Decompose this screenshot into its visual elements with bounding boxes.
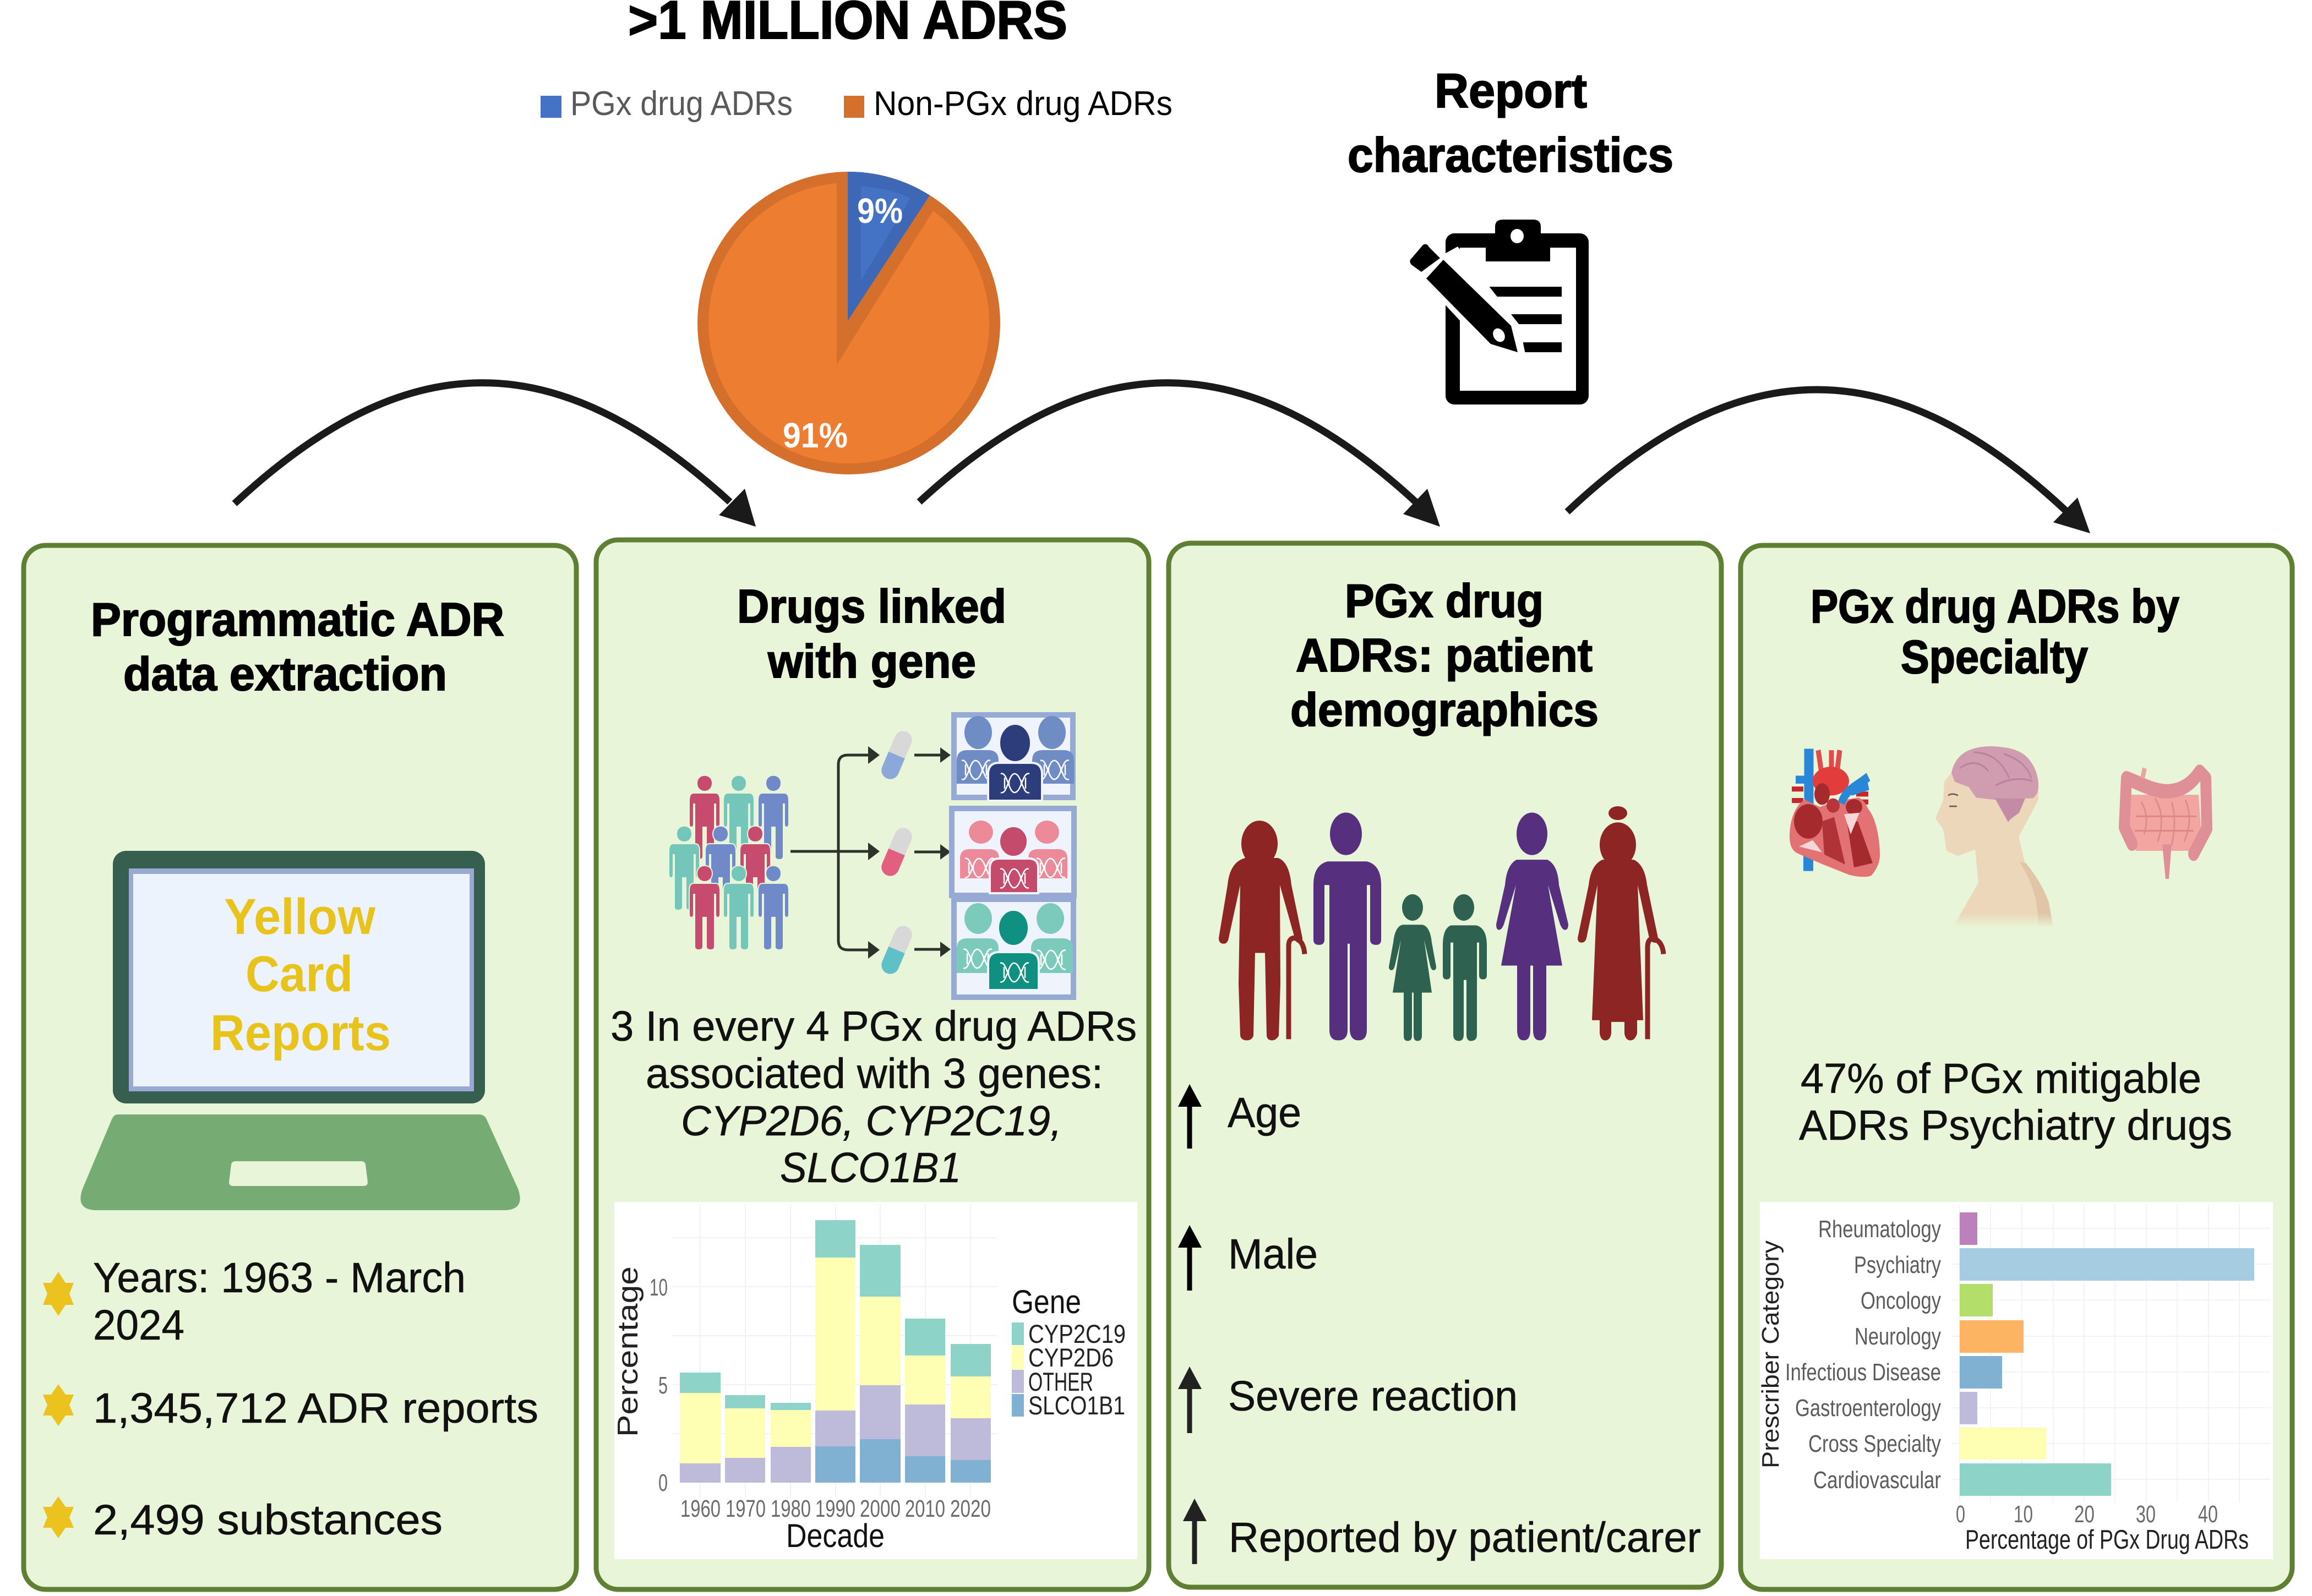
heading: report characteristics: Report: [1435, 63, 1587, 118]
category labels: [1757, 1216, 1941, 1494]
text: male: Male: [1228, 1231, 1318, 1278]
icon: pink capsule: [879, 825, 915, 879]
heading: drugs linked with gene: with gene: [767, 636, 976, 688]
category labels: Cross Specialty: [1808, 1430, 1941, 1457]
pie chart: 9% PGx vs 91% non-PGx: 91%: [783, 416, 848, 455]
figure: girl: [1389, 894, 1436, 1041]
heading: PGx drug ADRs patient demographics: [1290, 575, 1599, 736]
pie chart: 9% PGx vs 91% non-PGx: 9%: [857, 191, 903, 231]
category labels: Oncology: [1861, 1287, 1941, 1314]
category labels: Prescriber Category: [1757, 1240, 1784, 1468]
heading: programmatic ADR data extraction: [91, 594, 504, 701]
category labels: Psychiatry: [1854, 1251, 1941, 1278]
y axis labels: 0: [658, 1469, 668, 1496]
text: age: Age: [1228, 1089, 1301, 1136]
icon: heart: [1790, 749, 1880, 877]
gene legend: OTHER: [1028, 1367, 1093, 1396]
heading: report characteristics: characteristics: [1348, 128, 1673, 182]
category labels: Rheumatology: [1818, 1216, 1941, 1243]
icon: laptop showing Yellow Card Reports: Yellow: [224, 889, 375, 945]
x axis labels: 1960: [680, 1495, 721, 1522]
text: three genes statement: 3 In every 4 PGx drug ADRs: [610, 1003, 1137, 1050]
pie legend: Non-PGx drug ADRs: [874, 85, 1173, 123]
text: ADR report count: 1,345,712 ADR reports: [93, 1385, 538, 1432]
text: three genes statement: SLCO1B1: [780, 1144, 961, 1191]
card: blue gene group: [954, 715, 1074, 801]
icon: blue capsule: [879, 728, 915, 782]
heading: drugs linked with gene: [737, 581, 1006, 688]
text: years: 2024: [93, 1302, 184, 1349]
text: psychiatry statement: ADRs Psychiatry drugs: [1799, 1102, 2232, 1149]
heading: PGx drug ADRs by specialty: Specialty: [1901, 631, 2088, 684]
figure: boy: [1443, 894, 1487, 1041]
heading: report characteristics: [1348, 63, 1673, 182]
icon: laptop showing Yellow Card Reports: [80, 851, 520, 1210]
text: substance count: 2,499 substances: [93, 1496, 443, 1544]
pie chart: 9% PGx vs 91% non-PGx: [697, 172, 1000, 474]
diagram: population, drugs and gene responses: [669, 715, 1074, 997]
gene legend: [1012, 1283, 1126, 1420]
x axis labels: Decade: [786, 1517, 885, 1554]
card: pink gene group: [952, 808, 1074, 895]
pie legend: PGx drug ADRs: [570, 85, 793, 123]
stacked bar chart: percentage by decade and gene: [612, 1202, 1137, 1559]
gene legend: CYP2D6: [1028, 1343, 1114, 1372]
heading: drugs linked with gene: Drugs linked: [737, 581, 1006, 633]
icon: crowd of people: [669, 775, 789, 950]
x axis labels: 2010: [905, 1495, 945, 1522]
icon: family of six: [1219, 806, 1664, 1041]
category labels: Infectious Disease: [1785, 1359, 1941, 1386]
x axis labels: 1970: [726, 1495, 766, 1522]
list: extraction facts: [43, 1254, 538, 1544]
x axis labels: 2000: [860, 1495, 901, 1522]
bar chart: PGx drug ADRs by prescriber category: [1757, 1202, 2273, 1559]
heading: PGx drug ADRs patient demographics: demographics: [1290, 684, 1599, 736]
figure: elderly woman with cane: [1578, 806, 1664, 1040]
x axis labels: 1990: [815, 1495, 855, 1522]
x axis labels: 2020: [950, 1495, 991, 1522]
text: three genes statement: [610, 1003, 1137, 1191]
gene legend: CYP2C19: [1028, 1319, 1126, 1348]
value axis labels: [1956, 1501, 2249, 1555]
icon: head in profile with brain: [1935, 746, 2056, 928]
arrow up: reported by patient or carer: [1183, 1499, 1207, 1564]
icon: clipboard and pencil: [1410, 220, 1589, 405]
panel: programmatic ADR data extraction: [24, 545, 576, 1589]
y axis labels: 5: [658, 1372, 668, 1399]
icon: star bullet 2: [43, 1384, 74, 1426]
y axis labels: 10: [650, 1274, 668, 1301]
branching arrows to drugs: [790, 746, 951, 959]
pie legend: [541, 85, 1173, 123]
panel: PGx drug ADRs by specialty: [1741, 545, 2292, 1589]
text: psychiatry statement: [1799, 1055, 2232, 1149]
value axis labels: 20: [2074, 1501, 2095, 1528]
category labels: Cardiovascular: [1813, 1467, 1941, 1494]
icon: star bullet 3: [43, 1496, 74, 1538]
y axis labels: [612, 1266, 668, 1496]
bars: [1960, 1212, 2254, 1496]
category labels: Gastroenterology: [1795, 1395, 1941, 1422]
text: years: [93, 1254, 466, 1349]
bars: [680, 1220, 991, 1483]
category labels: Neurology: [1855, 1323, 1941, 1350]
gene legend: Gene: [1012, 1283, 1081, 1320]
icon: laptop showing Yellow Card Reports: Card: [246, 946, 353, 1002]
text: severe reaction: Severe reaction: [1228, 1373, 1518, 1420]
arrow up: age: [1178, 1084, 1202, 1149]
figure: adult woman: [1496, 812, 1568, 1040]
figure: elderly man with cane: [1219, 821, 1305, 1040]
value axis labels: 40: [2198, 1501, 2218, 1528]
heading: PGx drug ADRs by specialty: PGx drug ADRs by: [1811, 581, 2179, 633]
icon: star bullet 1: [43, 1272, 74, 1316]
y axis labels: Percentage: [612, 1266, 644, 1437]
heading: PGx drug ADRs patient demographics: ADRs: patient: [1296, 630, 1593, 682]
card: teal gene group: [954, 899, 1073, 997]
x axis labels: 1980: [771, 1495, 811, 1522]
arrow up: severe reaction: [1178, 1367, 1202, 1433]
arrow: report characteristics to panel 4: [1567, 390, 2090, 533]
panel: patient demographics: [1169, 543, 1721, 1587]
panel: drugs linked with gene: [596, 540, 1149, 1589]
arrow: pie to panel 3: [919, 383, 1440, 527]
arrow up: male: [1178, 1225, 1202, 1291]
value axis labels: 30: [2136, 1501, 2156, 1528]
value axis labels: 10: [2014, 1501, 2033, 1528]
gene legend: SLCO1B1: [1028, 1391, 1125, 1420]
heading: PGx drug ADRs patient demographics: PGx drug: [1345, 575, 1544, 627]
text: years: Years: 1963 - March: [93, 1254, 466, 1302]
list: increased risk factors: [1178, 1084, 1701, 1564]
arrow: panel 1 to panel 2: [235, 383, 756, 527]
text: psychiatry statement: 47% of PGx mitigable: [1801, 1055, 2201, 1102]
x axis labels: [680, 1495, 991, 1554]
heading: programmatic ADR data extraction: Programmatic ADR: [91, 594, 504, 646]
heading: programmatic ADR data extraction: data extraction: [123, 648, 447, 701]
text: reported by patient or carer: Reported by patient/carer: [1229, 1514, 1701, 1561]
figure: adult man: [1313, 812, 1381, 1040]
icon: laptop showing Yellow Card Reports: Reports: [210, 1005, 391, 1061]
text: three genes statement: associated with 3 genes:: [646, 1050, 1103, 1097]
icon: intestines: [2124, 768, 2207, 879]
text: three genes statement: CYP2D6, CYP2C19,: [681, 1097, 1062, 1145]
value axis labels: 0: [1956, 1501, 1965, 1528]
heading: PGx drug ADRs by specialty: [1811, 581, 2179, 684]
icon: teal capsule: [879, 923, 915, 977]
